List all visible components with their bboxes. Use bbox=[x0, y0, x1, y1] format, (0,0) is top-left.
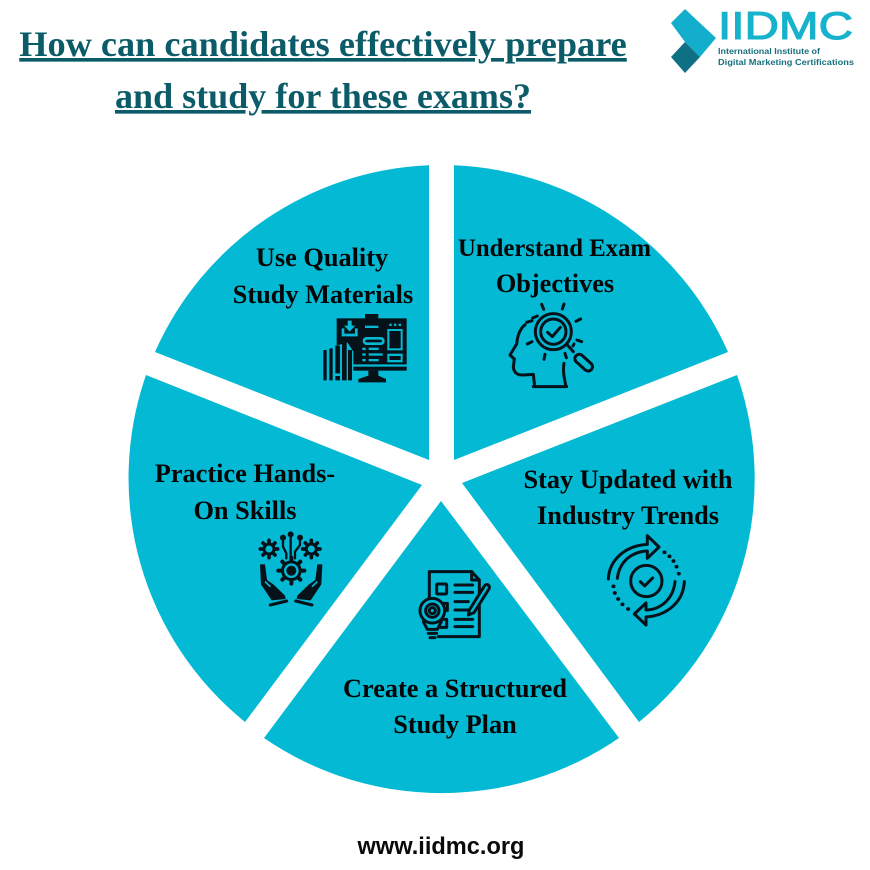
title: and study for these exams? bbox=[115, 76, 531, 116]
label: create a structured study plan: Create a Structured bbox=[343, 674, 567, 703]
segment: understand exam objectives bbox=[454, 165, 728, 460]
segment: stay updated bbox=[462, 375, 755, 722]
pie chart bbox=[129, 165, 755, 793]
label: stay updated with industry trends: Industry Trends bbox=[537, 501, 719, 530]
segment: use quality study materials bbox=[155, 165, 429, 460]
logo tagline: Digital Marketing Certifications bbox=[718, 58, 855, 67]
segment: create a structured study plan bbox=[264, 501, 619, 793]
label: stay updated with industry trends: Stay Updated with bbox=[524, 465, 733, 494]
icon: hands holding gears bbox=[260, 531, 322, 605]
logo mark bbox=[671, 9, 716, 73]
footer url: www.iidmc.org bbox=[357, 834, 524, 860]
logo: IIDMC bbox=[671, 5, 855, 73]
label: use quality study materials: Use Quality bbox=[256, 243, 388, 272]
label: understand exam objectives: Understand Exam bbox=[458, 235, 651, 262]
logo tagline bbox=[718, 47, 855, 67]
label: practice hands-on skills: On Skills bbox=[193, 496, 297, 525]
label: use quality study materials: Study Materials bbox=[233, 280, 413, 309]
icon: document with gear bulb and pencil bbox=[420, 572, 489, 638]
title bbox=[19, 24, 627, 116]
label: understand exam objectives: Objectives bbox=[496, 269, 614, 298]
segment: practice hands-on skills bbox=[129, 375, 422, 722]
icon: head with magnifier bbox=[510, 304, 594, 387]
icon: monitor with books bbox=[323, 314, 407, 382]
title: How can candidates effectively prepare bbox=[19, 24, 627, 64]
label: practice hands-on skills: Practice Hands- bbox=[155, 459, 335, 488]
label: create a structured study plan: Study Plan bbox=[393, 710, 517, 739]
logo tagline: International Institute of bbox=[718, 47, 820, 56]
logo wordmark: IIDMC bbox=[718, 5, 853, 48]
icon: refresh cycle with check bbox=[608, 536, 684, 625]
